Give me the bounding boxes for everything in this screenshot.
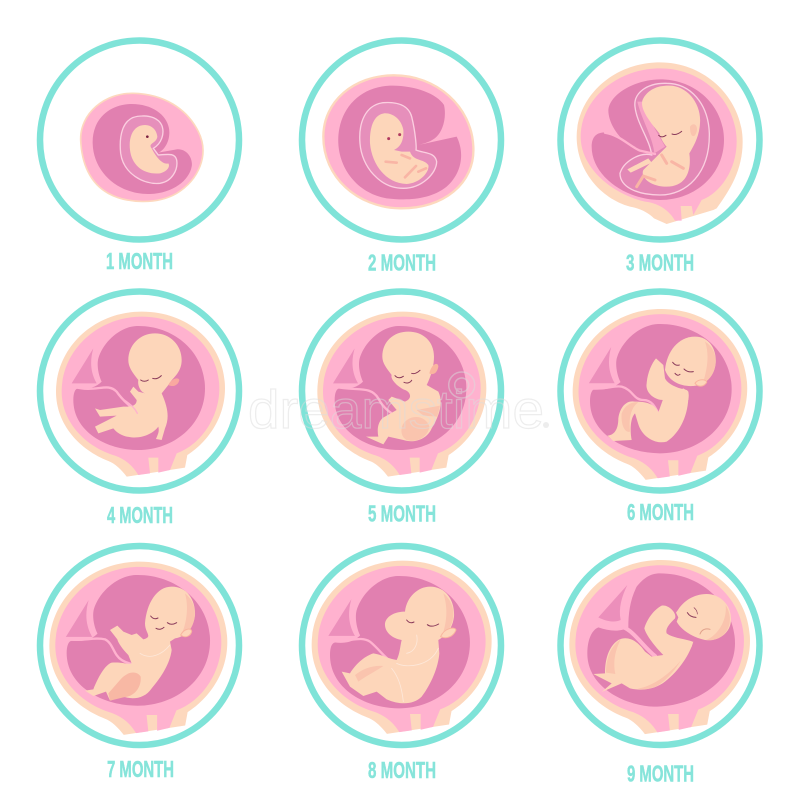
umbilical cord: 5 month — [335, 387, 392, 413]
face: 7 month — [151, 616, 177, 629]
label: 1 month: 1 MONTH — [106, 248, 173, 274]
label: 3 month: 3 MONTH — [626, 250, 694, 276]
head shading: 8 month — [442, 593, 453, 636]
ear: 6 month — [695, 380, 707, 386]
ring: 6 month — [560, 292, 760, 490]
ring: 8 month — [302, 546, 501, 745]
ring: 5 month — [302, 292, 501, 490]
ring: 9 month — [560, 546, 760, 745]
ear: 4 month — [168, 378, 179, 386]
face: 8 month — [407, 620, 439, 626]
fetus head: 9 month — [676, 594, 731, 640]
illustration: 6 month fetus — [573, 309, 747, 480]
body shading: 9 month — [606, 639, 681, 689]
label: 6 month: 6 MONTH — [627, 499, 694, 525]
panel: 6 month — [560, 292, 760, 525]
head shading: 7 month — [181, 593, 195, 637]
umbilical cord: 9 month — [623, 627, 655, 656]
panel: 9 month — [560, 546, 760, 786]
illustration: 2 month embryo — [323, 75, 473, 208]
head shading: 9 month — [706, 605, 730, 640]
illustration: 9 month fetus — [569, 560, 750, 734]
fetus: 5 month — [366, 332, 441, 444]
umbilical cord: 6 month — [591, 386, 658, 413]
panel: 2 month — [302, 40, 501, 276]
face: 4 month — [141, 376, 161, 381]
fetus arm: 6 month — [646, 358, 689, 400]
uterus: 5 month — [317, 312, 486, 477]
uterus: 9 month — [569, 560, 750, 734]
uterus: 6 month — [573, 309, 747, 480]
uterus: 8 month — [312, 561, 492, 734]
fetus head: 6 month — [665, 337, 716, 386]
face: 9 month — [687, 613, 696, 617]
uterus: 4 month — [56, 312, 225, 477]
label: 7 month: 7 MONTH — [107, 756, 174, 782]
illustration: 3 month fetus — [577, 62, 743, 224]
label: 9 month: 9 MONTH — [627, 760, 694, 786]
fetus body: 6 month — [607, 388, 688, 442]
ring: 1 month — [40, 40, 239, 240]
head shading: 6 month — [703, 342, 716, 384]
label: 2 month: 2 MONTH — [368, 250, 436, 276]
panel: 7 month — [40, 546, 239, 782]
illustration: 7 month fetus — [49, 562, 227, 735]
illustration: 5 month fetus — [317, 312, 486, 477]
illustration: 1 month embryo — [81, 93, 203, 201]
umbilical cord: 4 month — [73, 387, 137, 413]
ear: 8 month — [441, 628, 456, 638]
ring: 7 month — [40, 546, 239, 745]
panel: 8 month — [302, 546, 501, 783]
fetus arm: 9 month — [644, 605, 693, 655]
illustration: 8 month fetus — [312, 561, 492, 734]
label: 8 month: 8 MONTH — [368, 757, 436, 783]
uterus: 7 month — [49, 562, 227, 735]
label: 5 month: 5 MONTH — [368, 501, 436, 527]
fetus: 8 month — [342, 587, 454, 703]
panel: 5 month — [302, 292, 501, 527]
arm outline: 7 month — [140, 645, 170, 656]
ear: 5 month — [429, 364, 438, 374]
face: 6 month — [673, 362, 693, 375]
face: 5 month — [395, 370, 420, 383]
watermark: dreamstime — [248, 380, 544, 440]
ring: 3 month — [560, 40, 760, 240]
body outlines: 8 month — [392, 635, 438, 702]
panel: 3 month — [560, 40, 760, 276]
knee shading: 6 month — [622, 402, 638, 432]
fetus body: 9 month — [593, 638, 693, 692]
cord over body: 4 month — [120, 397, 137, 413]
leg shading: 8 month — [355, 666, 383, 682]
ring: 4 month — [40, 292, 239, 490]
umbilical cord: 8 month — [330, 639, 393, 663]
fetus: 7 month — [85, 587, 195, 701]
panel: 1 month — [40, 40, 239, 274]
eyebrow: 9 month — [694, 608, 697, 614]
fetus: 4 month — [95, 333, 182, 440]
ear: 7 month — [181, 629, 192, 637]
panel: 4 month — [40, 292, 239, 528]
umbilical cord: 7 month — [67, 639, 138, 667]
label: 4 month: 4 MONTH — [107, 502, 173, 528]
knee shading: 7 month — [108, 673, 141, 701]
illustration: 4 month fetus — [56, 312, 225, 477]
ring: 2 month — [302, 40, 501, 240]
knee shading: 5 month — [401, 417, 429, 441]
ear: 9 month — [700, 629, 710, 634]
